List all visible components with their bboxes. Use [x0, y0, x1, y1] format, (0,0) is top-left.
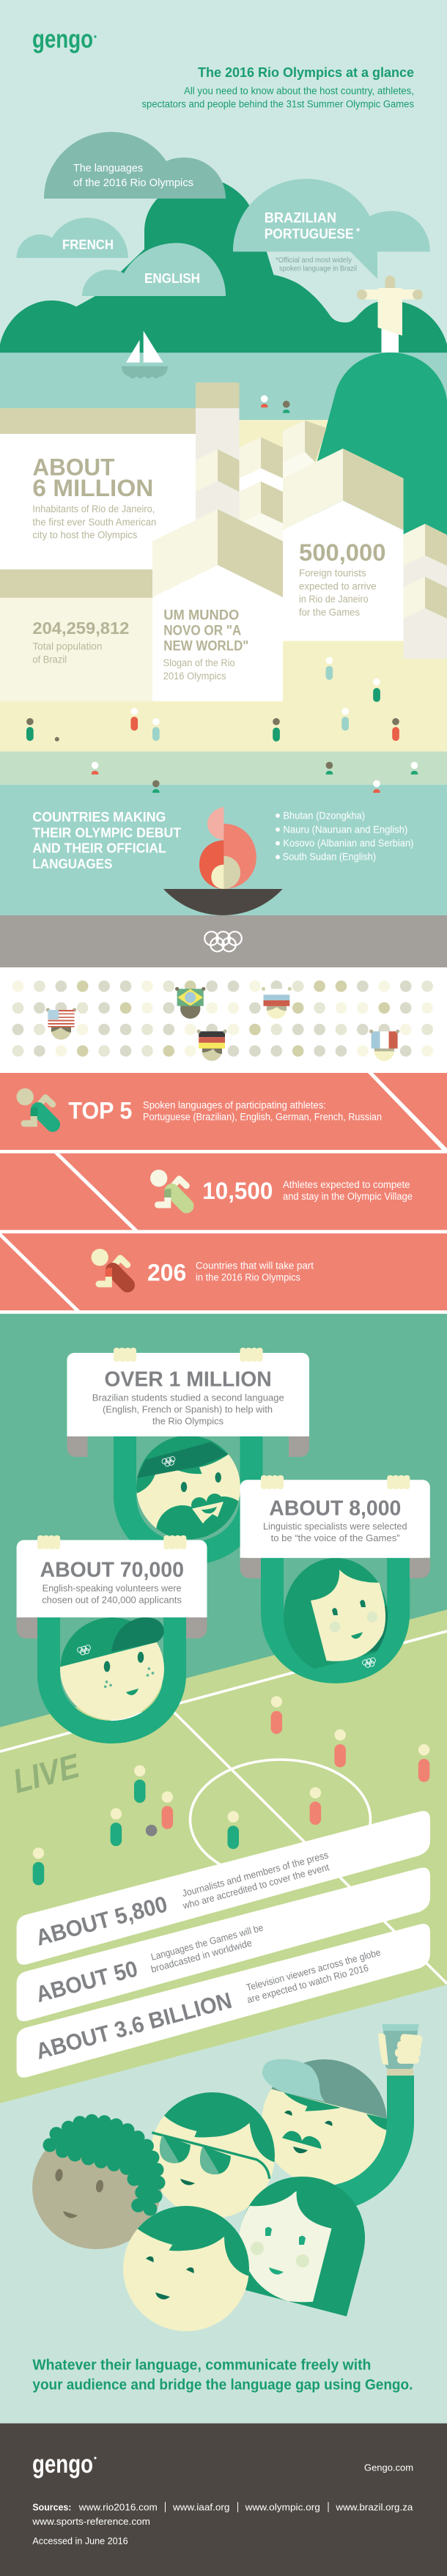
character: volunteer with cap [60, 1617, 164, 1720]
text: 500,000 tourists: expected to arrive [299, 580, 377, 592]
icon: sailboat [122, 331, 168, 378]
character: boy in front [123, 2206, 249, 2331]
people on the beach [26, 657, 399, 742]
stat pill: about 5,800: who are accredited to cover the event [181, 1861, 330, 1911]
heading: COUNTRIES MAKING [32, 809, 166, 824]
banner: about 70,000: chosen out of 240,000 applicants [42, 1595, 182, 1605]
illustration: city buildings [0, 383, 447, 659]
text: 500,000 tourists: 500,000 [299, 539, 385, 566]
banner: over 1 million [67, 1348, 309, 1457]
panel: slogan building: 2016 Olympics [163, 671, 226, 682]
panel: grey band with Olympic rings [0, 915, 447, 967]
text: 500,000 tourists [299, 539, 385, 618]
panel: track lane countries [0, 1233, 447, 1310]
logo: gengo: gengo [32, 25, 93, 53]
stat pill: about 5,800: ABOUT 5,800 [33, 1891, 170, 1951]
panel: track lane top 5: Spoken languages of participating athletes: [143, 1099, 326, 1110]
stat pill: about 50: broadcasted in worldwide [149, 1937, 253, 1975]
list: debut countries: Bhutan (Dzongkha) [283, 810, 365, 822]
panel: track lane athletes: and stay in the Olympic Village [283, 1191, 413, 1202]
banner: over 1 million: OVER 1 MILLION [104, 1368, 272, 1391]
banner: over 1 million: the Rio Olympics [152, 1416, 224, 1427]
character: man with cap and moustache [262, 2059, 387, 2185]
title: The 2016 Rio Olympics at a glance [198, 64, 414, 80]
panel: population of Brazil: of Brazil [32, 654, 67, 665]
swimmers [261, 395, 290, 413]
panel: about 6 million: ABOUT [32, 454, 115, 481]
text: 500,000 tourists: Foreign tourists [299, 568, 366, 579]
banner: about 8,000: Linguistic specialists were selected [263, 1521, 407, 1532]
panel: track lane athletes: Athletes expected to compete [283, 1179, 410, 1190]
cloud: Brazilian Portuguese: BRAZILIAN [265, 210, 336, 226]
text: 500,000 tourists: for the Games [299, 607, 360, 618]
panel: slogan building: Slogan of the Rio [163, 657, 235, 668]
swimmers at waterline [152, 780, 380, 793]
stat pill: about 5,800: Journalists and members of the press [181, 1849, 330, 1899]
banner: over 1 million: Brazilian students studied a second language [92, 1392, 284, 1403]
illustration: raised arm with cup [322, 2024, 423, 2206]
panel: green stadium background [0, 1314, 447, 2428]
cloud: Brazilian Portuguese: * [356, 226, 361, 237]
character: bearded man [136, 1436, 240, 1539]
icon: Olympic flame [163, 807, 283, 915]
list: debut countries: South Sudan (English) [283, 851, 376, 863]
panel: track lane athletes [0, 1154, 447, 1230]
banner: about 70,000 [17, 1535, 207, 1639]
heading: LANGUAGES [32, 856, 112, 871]
footnote: official language: spoken language in Brazil [279, 265, 357, 273]
panel: slogan building [152, 509, 283, 701]
icon: Olympic rings [204, 931, 242, 951]
character: woman with long hair and freckles [240, 2177, 365, 2317]
panel: population of Brazil: Total population [32, 641, 102, 652]
subtitle: All you need to know about the host country, athletes, [184, 86, 414, 97]
panel: population of Brazil: 204,259,812 [32, 619, 129, 638]
heading [32, 809, 182, 871]
panel: about 6 million [0, 434, 196, 569]
stat pill: about 50 [17, 1867, 430, 2021]
cloud: English [82, 243, 226, 296]
sources: www.rio2016.com [78, 2502, 158, 2513]
footnote: official language [276, 256, 357, 273]
panel: sea [0, 331, 447, 420]
panel: track lane countries: in the 2016 Rio Olympics [196, 1272, 300, 1283]
sources: www.brazil.org.za [335, 2502, 413, 2513]
illustration: green hill [315, 353, 447, 539]
stat pill: about 3.6 billion: are expected to watch Rio 2016 [245, 1962, 369, 2005]
banner: over 1 million: (English, French or Spanish) to help with [103, 1404, 273, 1414]
panel: track lane top 5: TOP 5 [68, 1098, 132, 1124]
flag: Russia [262, 987, 292, 1019]
character: woman with long hair [284, 1558, 388, 1669]
sources: www.sports-reference.com [32, 2516, 150, 2527]
flag: Germany [197, 1030, 227, 1061]
panel: football field [0, 1609, 447, 2103]
stat pill: about 5,800 [17, 1811, 430, 1965]
stat pill: about 50: Languages the Games will be [149, 1922, 265, 1963]
stat pill: about 50: ABOUT 50 [33, 1956, 140, 2007]
panel: Olympic debut countries [0, 780, 447, 915]
closing message: Whatever their language, communicate freely with [32, 2356, 371, 2373]
panel: population of Brazil [0, 569, 152, 701]
cloud: Brazilian Portuguese: PORTUGUESE [265, 227, 354, 242]
panel: about 6 million: Inhabitants of Rio de Janeiro, [32, 503, 155, 514]
list: debut countries: Kosovo (Albanian and Serbian) [283, 837, 413, 849]
banner: about 8,000 [240, 1475, 430, 1579]
label: LIVE: LIVE [9, 1746, 84, 1801]
crowd dots with flags [12, 981, 433, 1061]
panel: track lane athletes: 10,500 [202, 1178, 273, 1204]
mountains [0, 182, 447, 353]
panel: shallow water strip [0, 751, 447, 785]
panel: about 6 million: city to host the Olympics [32, 530, 138, 541]
sources: Accessed in June 2016 [32, 2536, 128, 2547]
heading: AND THEIR OFFICIAL [32, 841, 166, 856]
panel: track lane top 5 [0, 1073, 447, 1150]
list: debut countries [276, 810, 413, 863]
panel: slogan building: UM MUNDO [163, 608, 239, 623]
cloud: English: ENGLISH [144, 271, 200, 286]
banner: about 8,000: ABOUT 8,000 [269, 1496, 401, 1520]
panel: track lane countries: 206 [147, 1259, 186, 1285]
text: 500,000 tourists: in Rio de Janeiro [299, 594, 369, 605]
closing message [32, 2356, 413, 2393]
players [33, 1696, 429, 1885]
character: woman with sunglasses [150, 2089, 278, 2218]
panel: about 6 million: 6 MILLION [32, 475, 153, 501]
panel: slogan building: NEW WORLD" [163, 639, 248, 654]
icon: Christ the Redeemer [357, 276, 423, 353]
banner arms: about 8,000 [273, 1557, 399, 1672]
list: debut countries: Nauru (Nauruan and English) [283, 823, 407, 835]
banner: about 70,000: English-speaking volunteers were [43, 1582, 182, 1593]
character: curly-haired man [32, 2114, 166, 2249]
panel: slogan building: NOVO OR "A [163, 623, 242, 639]
icon: runner [91, 1249, 128, 1287]
flag: France [369, 1030, 399, 1061]
subtitle: spectators and people behind the 31st Summer Olympic Games [142, 98, 414, 109]
stat pill: about 3.6 billion: Television viewers across the globe [245, 1946, 382, 1993]
cloud: languages heading: of the 2016 Rio Olympics [73, 177, 193, 189]
logo: gengo white: gengo [32, 2450, 93, 2479]
panel: track lane top 5: Portuguese (Brazilian), English, German, French, Russian [143, 1111, 382, 1122]
banner: about 70,000: ABOUT 70,000 [40, 1558, 184, 1582]
subtitle [142, 86, 414, 109]
closing message: your audience and bridge the language gap using Gengo. [32, 2376, 413, 2393]
stat pill: about 3.6 billion [17, 1924, 430, 2078]
banner arms: over 1 million [125, 1436, 251, 1554]
sources: Sources: [32, 2502, 71, 2513]
icon: runner [16, 1088, 53, 1127]
banner: about 8,000: to be “the voice of the Games” [271, 1532, 400, 1543]
sources: www.olympic.org [245, 2502, 320, 2513]
flag: Brazil [175, 987, 205, 1019]
panel: about 6 million: the first ever South American [32, 517, 156, 528]
sources: www.iaaf.org [172, 2502, 229, 2513]
heading: THEIR OLYMPIC DEBUT [32, 824, 182, 840]
cloud: Brazilian Portuguese [233, 179, 430, 279]
banner arms: about 70,000 [48, 1617, 174, 1732]
cloud: French [16, 218, 128, 258]
cloud: languages heading: The languages [73, 162, 143, 174]
footnote: official language: *Official and most widely [276, 256, 352, 265]
panel: footer [0, 2424, 447, 2576]
cloud: languages heading [44, 132, 226, 199]
icon: runner [150, 1170, 186, 1208]
stat pill: about 3.6 billion: ABOUT 3.6 BILLION [33, 1988, 234, 2064]
panel: sand [0, 420, 447, 751]
cloud: French: FRENCH [62, 237, 114, 252]
flag: USA [46, 1008, 76, 1040]
panel: light ground [0, 1971, 447, 2429]
link: Gengo.com: Gengo.com [364, 2462, 413, 2473]
sources [32, 2502, 413, 2547]
panel: track lane countries: Countries that will take part [196, 1261, 314, 1272]
panel: intro sky [0, 0, 447, 353]
